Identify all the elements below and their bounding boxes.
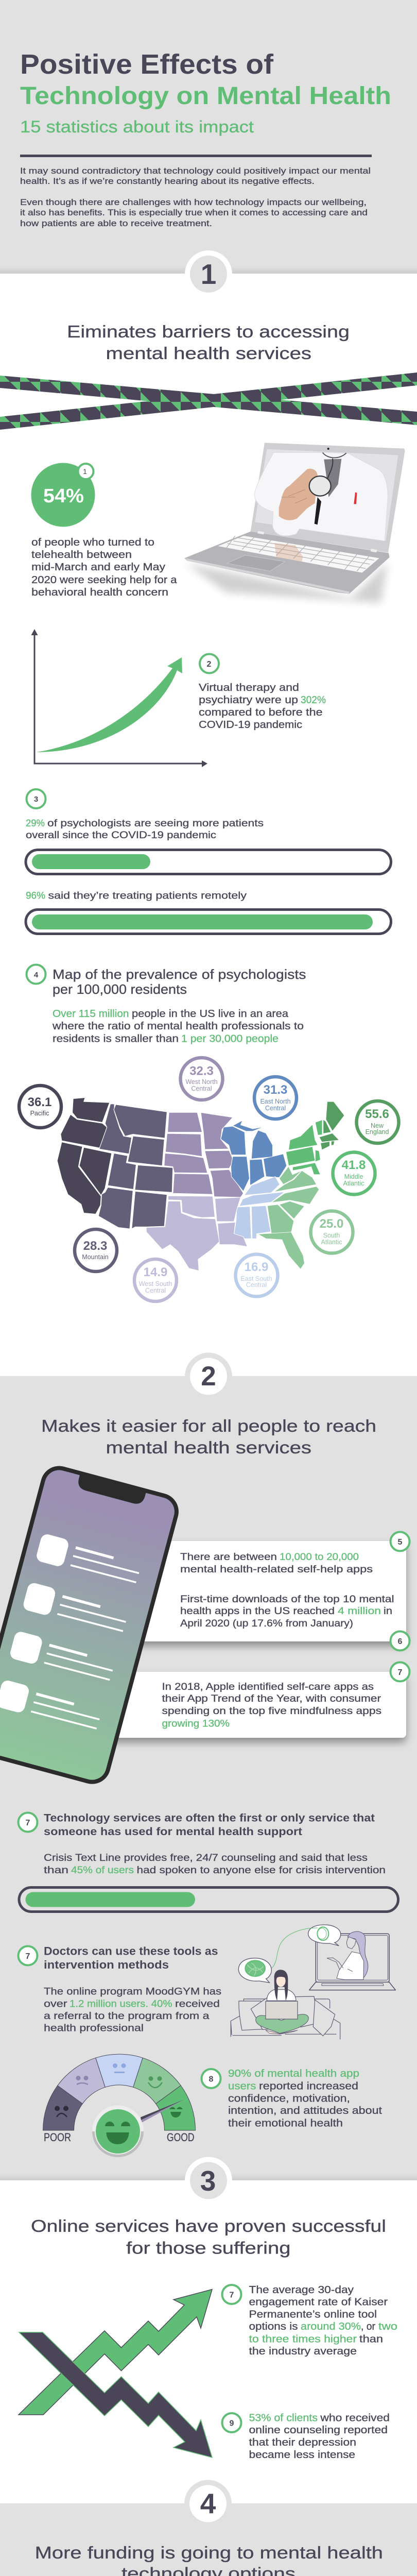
woman on sofa (256, 1970, 308, 2034)
stat 2 text: 302% (301, 694, 326, 706)
section 3 number badge: 3 (200, 2165, 216, 2197)
map label: West South Central 14.9 (134, 1259, 177, 1301)
laptop with doctor photo illustration (184, 443, 405, 603)
card text: Apple trend: growing 130% (162, 1718, 230, 1729)
title: Positive Effects of (20, 49, 274, 80)
engagement text: engagement rate of Kaiser (249, 2297, 388, 2308)
badge 7 technology services: 7 (26, 1819, 30, 1827)
stat 1 text: behavioral health concern (31, 587, 168, 598)
section 1 number badge: 1 (201, 258, 216, 290)
gauge labels: POOR (44, 2131, 71, 2144)
sofa and cushions (231, 1996, 340, 2039)
stat 1 text: mid-March and early May (31, 562, 165, 573)
engagement text: the industry average (249, 2346, 357, 2357)
stat 2 text: psychiatry were up (199, 694, 298, 706)
badge 7 card (390, 1662, 410, 1682)
stat 1: 54% circle: 1 (83, 467, 87, 476)
intro text: it also has benefits. This is especially true when it comes to accessing care and (20, 208, 368, 217)
stat 4 text: residents is smaller than (53, 1033, 179, 1045)
crisis text line text: had spoken to anyone else for crisis intervention (137, 1865, 386, 1876)
crisis text line text: Crisis Text Line provides free, 24/7 counseling and said that less (44, 1852, 368, 1863)
intro text: Even though there are challenges with how technology impacts our wellbeing, (20, 197, 367, 207)
map label: West South Central 14.9: Central (145, 1287, 166, 1294)
badge 6 (390, 1631, 410, 1651)
region: Pacific (57, 1098, 112, 1214)
big smiley dial (92, 2105, 144, 2157)
engagement text: than (359, 2334, 383, 2345)
stat 9 text: that their depression (249, 2437, 356, 2448)
region: West North Central (164, 1112, 244, 1197)
region: East South Central (234, 1177, 285, 1239)
doctors heading (44, 1945, 218, 1971)
card text: Apple trend: their App Trend of the Year, with consumer (162, 1693, 381, 1704)
map label: East South Central 16.9 (236, 1254, 278, 1296)
face: very happy (169, 2107, 183, 2117)
stat 2 text: Virtual therapy and (199, 682, 299, 693)
stat 2 text: COVID-19 pandemic (199, 719, 302, 731)
stat 96% text: 96% (26, 890, 45, 902)
engagement text: The average 30-day (249, 2284, 354, 2296)
map label: East North Central 31.3: East North (260, 1098, 291, 1105)
card text: self-help apps: 4 million (338, 1605, 381, 1617)
map label: New England 55.6: 55.6 (365, 1107, 389, 1121)
MoodGYM text: over (44, 1998, 67, 2009)
map label: Middle Atlantic 41.8: Atlantic (343, 1180, 364, 1187)
doctors heading: Doctors can use these tools as (44, 1945, 218, 1958)
stat 3 badge (27, 789, 45, 808)
stat 2 badge: 2 (207, 660, 212, 669)
title: 15 statistics about its impact (20, 117, 254, 136)
section 3 heading (31, 2216, 386, 2258)
map label: East North Central 31.3: 31.3 (264, 1083, 287, 1097)
MoodGYM text: health professional (44, 2023, 144, 2034)
dark down arrow (19, 2332, 212, 2458)
map label: South Atlantic 25.0: 25.0 (320, 1217, 343, 1231)
section 2 heading: mental health services (106, 1438, 311, 1457)
region: West South Central (146, 1196, 247, 1271)
card text: self-help apps: There are between (180, 1551, 277, 1563)
stat 2 badge (200, 654, 219, 673)
card text: self-help apps (180, 1551, 394, 1629)
map label: New England 55.6: England (366, 1128, 389, 1136)
badge 6: 6 (398, 1637, 403, 1646)
section 2 number badge (185, 1353, 232, 1400)
laptop with counsellor (309, 1931, 395, 1990)
map label: New England 55.6: New (371, 1122, 384, 1129)
stat 1 text: of people who turned to (31, 537, 154, 548)
map label: Mountain 28.3: 28.3 (83, 1239, 107, 1253)
stat 4 heading (53, 967, 306, 997)
stat 8 text: users (228, 2080, 256, 2092)
badge 7 doctors: 7 (26, 1952, 30, 1961)
phone illustration (0, 1462, 183, 1788)
stat 8 text: reported increased (259, 2080, 358, 2092)
map label: South Atlantic 25.0 (311, 1211, 353, 1253)
title: Technology on Mental Health (20, 82, 391, 110)
intro text (20, 166, 371, 228)
section 1 heading: Eiminates barriers to accessing (67, 322, 350, 341)
map label: West North Central 32.3 (180, 1058, 222, 1100)
badge 9: 9 (230, 2419, 234, 2428)
MoodGYM text: received (175, 1998, 220, 2009)
MoodGYM text (44, 1986, 221, 2034)
stat 3 badge: 3 (34, 795, 38, 804)
stat 4 text: 1 per 30,000 people (181, 1033, 279, 1045)
map label: East North Central 31.3: Central (265, 1105, 286, 1112)
badge 7 technology services (19, 1812, 37, 1832)
stat 3 text (26, 818, 264, 841)
badge 8: 8 (209, 2075, 214, 2083)
map label: West North Central 32.3: 32.3 (189, 1064, 214, 1078)
app row 3 (9, 1631, 113, 1680)
region: Mountain (98, 1104, 173, 1229)
engagement text: to three times higher (249, 2334, 357, 2345)
face: neutral (113, 2063, 126, 2073)
section 1 number badge (185, 250, 232, 298)
map label: West South Central 14.9: 14.9 (144, 1265, 167, 1279)
stat 9 text: online counseling reported (249, 2425, 388, 2436)
progress bar 96% (26, 910, 391, 934)
stat 4 text: Over 115 million (53, 1008, 129, 1020)
technology services heading: someone has used for mental health support (44, 1826, 302, 1838)
technology services heading: Technology services are often the first or only service that (44, 1812, 375, 1824)
card: Apple self-care apps (103, 1672, 406, 1738)
map label: South Atlantic 25.0: South (323, 1232, 340, 1239)
caution tape barrier (0, 372, 417, 430)
stat 8 text (228, 2068, 383, 2129)
badge 9 (222, 2413, 241, 2432)
section 3 number badge (185, 2157, 232, 2204)
chart axes (34, 635, 202, 764)
region: East North Central (221, 1121, 287, 1191)
map label: Middle Atlantic 41.8: 41.8 (342, 1158, 366, 1172)
stat 8 text: 90% of mental health app (228, 2068, 359, 2079)
badge 8 (202, 2069, 220, 2088)
stat 4 text (52, 1008, 304, 1045)
gauge segments (43, 2054, 196, 2130)
crisis text line text (44, 1852, 386, 1876)
title (20, 49, 391, 136)
engagement text: around 30% (301, 2321, 361, 2332)
progress bar 29% (26, 850, 391, 874)
stat 96% text: said they’re treating patients remotely (48, 890, 247, 902)
stat 9 text: 53% of clients (249, 2413, 318, 2424)
MoodGYM text: The online program MoodGYM has (44, 1986, 221, 1997)
stat 4 heading: per 100,000 residents (53, 981, 187, 997)
map label: Mountain 28.3: Mountain (82, 1253, 109, 1261)
green growth arrow (36, 657, 182, 752)
stat 1 text: telehealth between (31, 549, 132, 561)
stat 4 text: people in the US live in an area (132, 1008, 289, 1020)
app row 4 (0, 1679, 99, 1728)
badge 5: 5 (398, 1538, 403, 1547)
map label: Pacific 36.1: Pacific (30, 1110, 49, 1117)
badge 7 doctors (19, 1946, 37, 1965)
intro text: health. It’s as if we’re constantly hearing about its negative effects. (20, 176, 315, 186)
stat 9 text: became less intense (249, 2449, 355, 2461)
stat 1 text: 2020 were seeking help for a (31, 574, 177, 586)
section 1 heading: mental health services (106, 344, 311, 363)
intro text: how patients are able to receive treatment. (20, 218, 212, 228)
crisis text line text: 45% of users (71, 1865, 134, 1876)
stat 2 text (199, 682, 326, 731)
face: poor (55, 2106, 68, 2117)
map label: New England 55.6 (356, 1101, 398, 1143)
speech bubble: clear thought (308, 1925, 341, 1946)
card text: self-help apps: mental health-related self-help apps (180, 1564, 373, 1575)
stat 8 text: confidence, motivation, (228, 2093, 350, 2104)
stat 4 heading: Map of the prevalence of psychologists (53, 967, 306, 982)
badge 7 engagement (222, 2285, 241, 2304)
map label: East South Central 16.9: 16.9 (245, 1260, 268, 1274)
chart: virtual therapy growth (31, 629, 207, 767)
map label: Pacific 36.1 (19, 1086, 61, 1128)
stat 4 badge (27, 964, 45, 984)
US map of regions (57, 1098, 344, 1271)
section 2 heading: Makes it easier for all people to reach (41, 1416, 376, 1435)
map label: Pacific 36.1: 36.1 (28, 1095, 51, 1109)
green up arrow (19, 2290, 212, 2415)
map label: East North Central 31.3 (254, 1077, 297, 1119)
app row 2 (22, 1582, 126, 1631)
engagement text: , or (361, 2321, 375, 2332)
section 3 heading: for those suffering (126, 2238, 290, 2258)
stat 2 text: compared to before the (199, 707, 322, 718)
region: New England (319, 1101, 344, 1150)
stat 9 text (249, 2413, 390, 2461)
section 2 heading (41, 1416, 376, 1457)
stat 1 text (31, 537, 177, 598)
card text: Apple trend: In 2018, Apple identified self-care apps as (162, 1681, 374, 1692)
card text: Apple trend (162, 1681, 381, 1729)
gauge labels (44, 2131, 195, 2144)
map label: East South Central 16.9: Central (246, 1281, 267, 1289)
face: low (76, 2076, 89, 2084)
map label: West South Central 14.9: West South (139, 1280, 172, 1287)
stat 3 text: of psychologists are seeing more patients (47, 818, 264, 829)
MoodGYM text: 1.2 million users. 40% (70, 1998, 172, 2009)
region: Middle Atlantic (286, 1120, 322, 1175)
gauge: emotional health meter (43, 2054, 196, 2157)
card text: self-help apps: 10,000 to 20,000 (280, 1551, 359, 1563)
gauge labels: GOOD (167, 2131, 195, 2144)
stat 3 text: overall since the COVID-19 pandemic (26, 829, 216, 841)
region: South Atlantic (258, 1166, 319, 1269)
card text: self-help apps: in (384, 1605, 392, 1617)
face: happy (148, 2076, 162, 2088)
illustration: online counselling (231, 1925, 395, 2039)
stat 9 text: who received (320, 2413, 390, 2424)
map label: Middle Atlantic 41.8 (333, 1152, 375, 1194)
engagement text (249, 2284, 397, 2357)
stat 1: 54% circle (31, 463, 95, 527)
map label: West North Central 32.3: Central (191, 1085, 212, 1092)
intro text: It may sound contradictory that technology could positively impact our mental (20, 166, 371, 176)
crisis text line text: than (44, 1865, 68, 1876)
section 3 heading: Online services have proven successful (31, 2216, 386, 2235)
progress bar 45% (19, 1888, 398, 1911)
badge 7 card: 7 (398, 1668, 403, 1677)
crossing zigzag arrows (19, 2290, 212, 2458)
engagement text: Permanente’s online tool (249, 2309, 377, 2320)
technology services heading (44, 1812, 375, 1838)
card text: Apple trend: spending on the top five mindfulness apps (162, 1705, 381, 1717)
stat 8 text: intention, and attitudes about (228, 2105, 383, 2116)
title rule (20, 155, 372, 157)
app row 1 (35, 1533, 139, 1582)
engagement text: two (378, 2321, 397, 2332)
green thought line (265, 1928, 318, 1972)
card text: self-help apps: First-time downloads of the top 10 mental (180, 1594, 394, 1605)
MoodGYM text: a referral to the program from a (44, 2010, 210, 2022)
section 2 number badge: 2 (201, 1361, 216, 1392)
stat 4 badge: 4 (34, 971, 39, 979)
stat 3 text: 29% (26, 818, 45, 829)
map label: West North Central 32.3: West North (185, 1078, 218, 1086)
card: self-help apps stats (103, 1541, 406, 1641)
section 1 heading (67, 322, 350, 363)
section 4 heading (35, 2543, 383, 2576)
map label: Middle Atlantic 41.8: Middle (344, 1173, 363, 1180)
gauge needle (141, 2099, 184, 2123)
stat 8 text: their emotional health (228, 2117, 343, 2129)
card text: self-help apps: health apps in the US reached (180, 1605, 335, 1617)
map label: Mountain 28.3 (75, 1229, 117, 1272)
card text: self-help apps: April 2020 (up 17.6% from January) (180, 1618, 353, 1629)
stat 1: 54% circle: 54% (43, 485, 84, 507)
map label: South Atlantic 25.0: Atlantic (321, 1239, 342, 1246)
doctors heading: intervention methods (44, 1958, 169, 1971)
speech bubble: tangled thought (238, 1958, 271, 1982)
map label: East South Central 16.9: East South (240, 1275, 272, 1282)
section 4 number badge (184, 2480, 232, 2528)
badge 7 engagement: 7 (230, 2291, 234, 2300)
section 4 number badge: 4 (200, 2487, 216, 2519)
stat 4 text: where the ratio of mental health professionals to (52, 1021, 304, 1032)
engagement text: options is (249, 2321, 298, 2332)
section 4 heading: More funding is going to mental health (35, 2543, 383, 2562)
badge 5 (390, 1532, 410, 1551)
